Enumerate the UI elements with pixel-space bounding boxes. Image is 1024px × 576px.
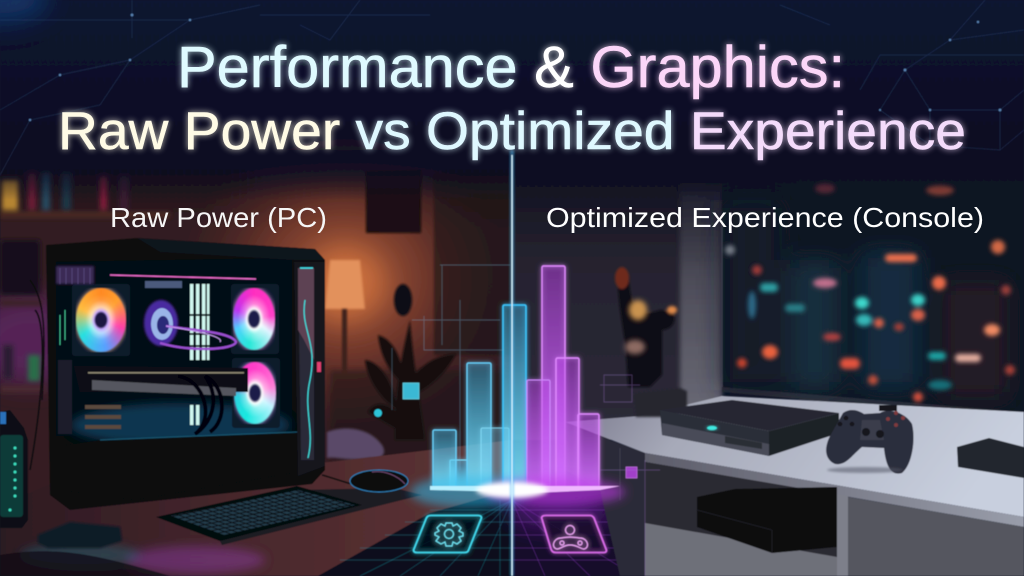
digital floor right — [505, 490, 680, 576]
bookshelf top left — [0, 172, 170, 392]
wall picture frame — [367, 172, 420, 232]
fan 3 — [234, 362, 276, 424]
shelf lower left panel — [565, 424, 645, 576]
fan 1 — [76, 288, 126, 352]
small box on desk — [38, 522, 122, 548]
plexus nodes — [29, 14, 1001, 121]
city lights on screen — [725, 183, 1015, 402]
cyan chart bars — [433, 305, 526, 487]
title — [58, 35, 966, 161]
motherboard detail left — [56, 266, 94, 284]
desk surface — [0, 440, 512, 576]
side glass panel — [294, 262, 325, 476]
right room wall — [512, 160, 722, 440]
background: top dark band — [0, 0, 1024, 200]
purple coolant tube — [160, 326, 236, 349]
central divider beam — [510, 150, 514, 576]
PC tower — [46, 238, 325, 510]
table lamp — [305, 247, 385, 371]
icon: gear tile — [414, 516, 481, 552]
RAM — [190, 284, 209, 425]
top fade into room — [0, 150, 1024, 200]
central glow flare — [410, 476, 625, 508]
shelf back surface — [565, 396, 1024, 517]
camera on shelf — [634, 388, 687, 417]
handheld device left — [0, 410, 28, 528]
shelf cabinet — [645, 462, 1024, 576]
game controller — [826, 405, 914, 474]
houseplant — [365, 284, 456, 440]
PCIe slots — [85, 405, 121, 429]
digital floor left — [318, 490, 512, 576]
label: raw power: Raw Power (PC) — [110, 202, 327, 233]
mouse pad — [220, 488, 422, 545]
case body — [46, 238, 325, 510]
black box in cabinet — [697, 487, 837, 553]
keyboard — [156, 486, 362, 541]
game console — [660, 400, 839, 456]
fine grid overlay — [0, 0, 1024, 200]
left room wall — [0, 130, 512, 500]
label: optimized experience: Optimized Experience (Console) — [546, 202, 984, 233]
interior window — [56, 258, 292, 436]
left IO column — [58, 360, 72, 434]
icon: gamepad tile — [542, 516, 606, 552]
pink top strip — [110, 275, 256, 279]
television — [722, 160, 1024, 420]
purple chart bars — [527, 266, 599, 487]
floating chart squares and data lines — [374, 265, 660, 576]
top left corner glow — [0, 0, 50, 25]
title line 1: Performance & Graphics: — [177, 35, 845, 100]
cables — [30, 280, 390, 492]
title line 2: Raw Power vs Optimized Experience — [58, 102, 966, 161]
shelf front edge — [645, 453, 1024, 527]
fan 2 — [233, 288, 275, 350]
GPU cables — [178, 376, 213, 434]
GPU — [74, 366, 248, 392]
computer mouse — [350, 470, 408, 492]
cloth on desk — [327, 428, 384, 459]
fan frames — [72, 284, 280, 428]
plexus network overlay — [0, 0, 1024, 175]
pump — [144, 300, 178, 346]
right small box — [957, 438, 1024, 478]
vase silhouette — [615, 267, 677, 387]
PSU shroud — [60, 432, 298, 500]
